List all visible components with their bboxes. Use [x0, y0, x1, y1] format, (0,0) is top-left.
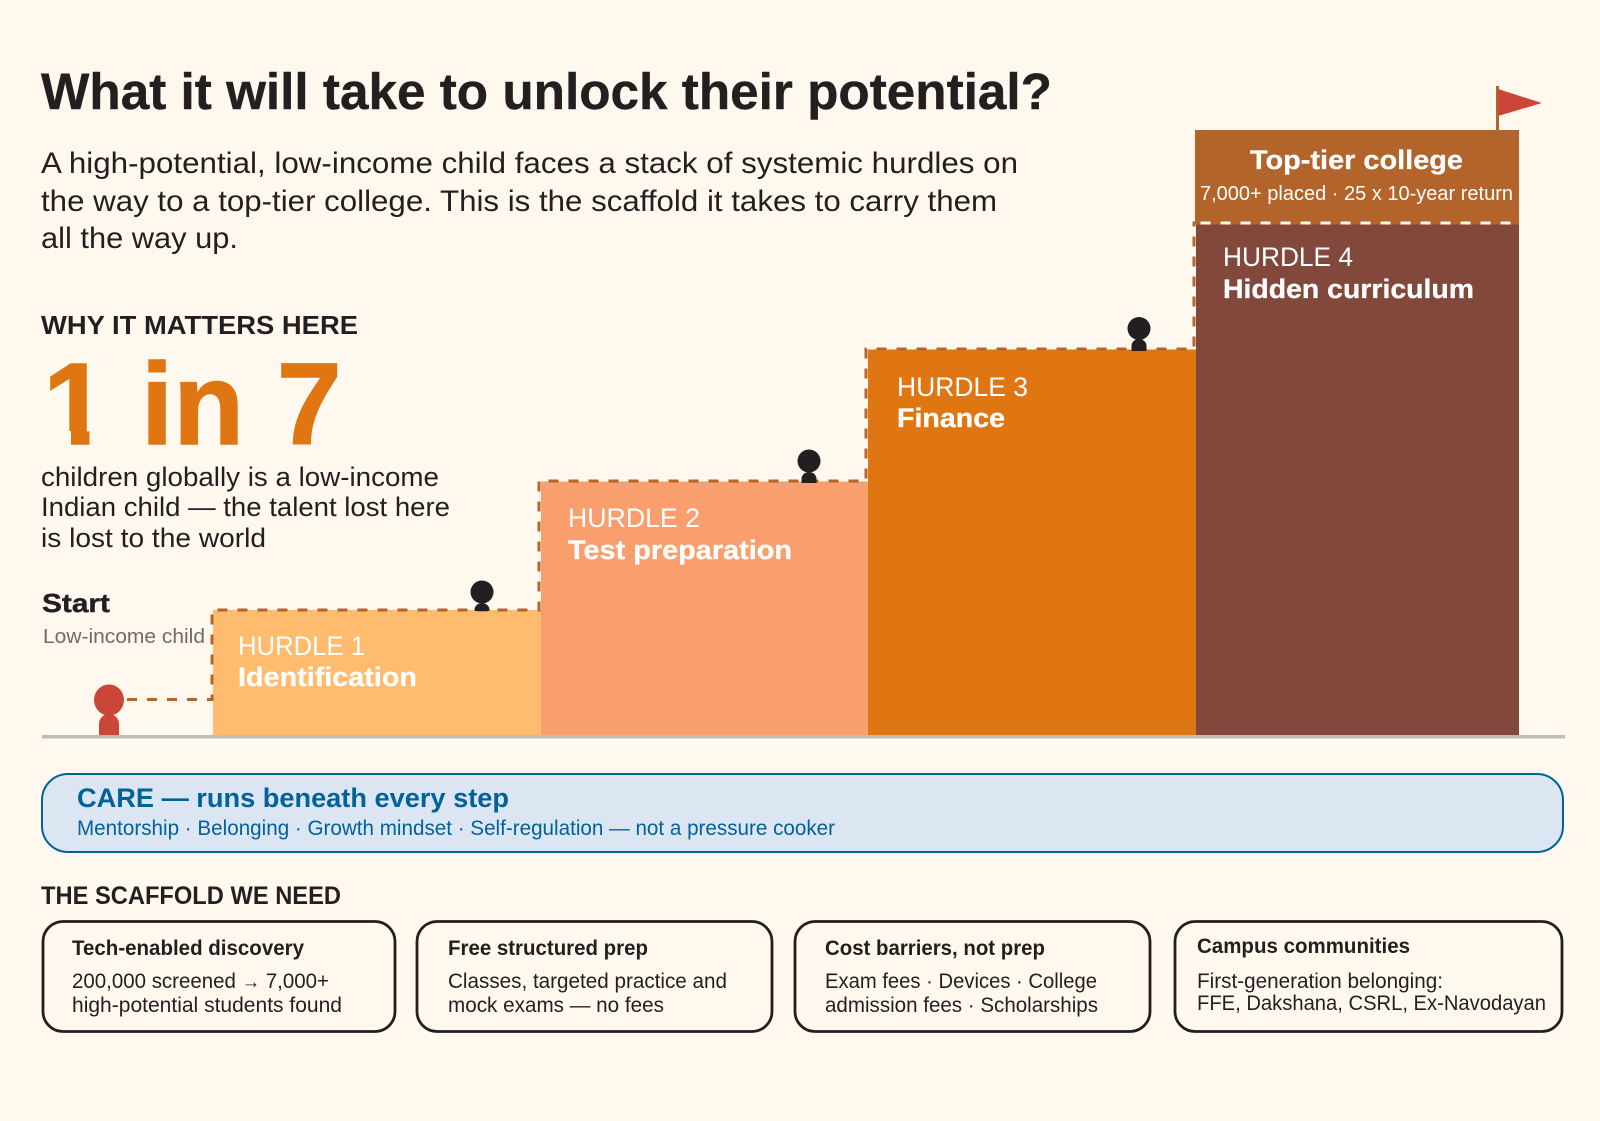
panel: hurdle 2: HURDLE 2 [568, 503, 700, 533]
panel: hurdle 3 [868, 350, 1196, 735]
intro text: A high-potential, low-income child faces a stack of systemic hurdles on [41, 147, 1018, 180]
callout: care: CARE — runs beneath every step [77, 783, 509, 813]
stat description: Indian child — the talent lost here [41, 492, 450, 522]
card: campus communities: FFE, Dakshana, CSRL, Ex-Navodayan [1197, 992, 1546, 1015]
big stat: 1 in 7: 1 [43, 339, 108, 469]
card: free structured prep: Free structured prep [448, 937, 648, 960]
card: cost barriers [795, 922, 1150, 1032]
card: free structured prep [417, 922, 772, 1032]
card: cost barriers: Exam fees · Devices · College [825, 970, 1097, 993]
intro text: the way to a top-tier college. This is the scaffold it takes to carry them [41, 185, 997, 218]
card: free structured prep: mock exams — no fees [448, 994, 664, 1017]
start label: Low-income child [43, 626, 205, 648]
dashed staircase path [127, 222, 1519, 700]
panel: hurdle 3: HURDLE 3 [897, 372, 1028, 402]
icon: figure on hurdle 3 [1128, 317, 1150, 351]
stat description: is lost to the world [41, 523, 266, 553]
card: campus communities [1175, 922, 1562, 1032]
card: campus communities: First-generation belonging: [1197, 970, 1443, 993]
stat description: children globally is a low-income [41, 462, 439, 492]
panel: hurdle 3: Finance [897, 403, 1005, 433]
panel: top-tier college: Top-tier college [1250, 145, 1463, 175]
card: free structured prep: Classes, targeted practice and [448, 970, 727, 993]
panel: hurdle 2: Test preparation [568, 535, 792, 565]
big stat: 1 in 7 [34, 339, 342, 469]
heading: the scaffold we need: THE SCAFFOLD WE NEED [41, 882, 341, 910]
baseline [42, 735, 1565, 738]
big stat: 1 in 7: 7 [277, 339, 342, 469]
start label [42, 588, 205, 648]
big stat: 1 in 7: in [141, 339, 244, 469]
panel: hurdle 4 [1196, 224, 1519, 735]
panel: top-tier college: 7,000+ placed · 25 x 10-year return [1200, 183, 1513, 205]
panel: hurdle 4: HURDLE 4 [1223, 242, 1353, 272]
panel: hurdle 4: Hidden curriculum [1223, 274, 1474, 304]
icon: child at start [94, 684, 124, 735]
callout: care [42, 774, 1563, 852]
callout: care: Mentorship · Belonging · Growth mindset · Self-regulation — not a pressure cooker [77, 817, 835, 840]
panel: hurdle 1: Identification [238, 662, 417, 692]
card: cost barriers: Cost barriers, not prep [825, 937, 1045, 960]
icon: flag [1496, 86, 1542, 130]
stat description [41, 462, 450, 553]
panel: hurdle 1: HURDLE 1 [238, 631, 365, 661]
intro text: all the way up. [41, 222, 238, 255]
title: What it will take to unlock their potential? [41, 63, 1052, 120]
icon: figure on hurdle 2 [798, 450, 820, 483]
intro text [41, 147, 1018, 255]
card: campus communities: Campus communities [1197, 935, 1410, 958]
start label: Start [42, 588, 110, 618]
card: tech-enabled discovery [43, 922, 395, 1032]
card: tech-enabled discovery: 200,000 screened → 7,000+ [72, 970, 329, 993]
panel: hurdle 1 [213, 610, 541, 735]
heading: why it matters: WHY IT MATTERS HERE [41, 310, 358, 340]
icon: figure on hurdle 1 [470, 580, 494, 611]
panel: hurdle 2 [541, 482, 868, 735]
panel: top-tier college [1195, 130, 1519, 222]
card: cost barriers: admission fees · Scholarships [825, 994, 1098, 1017]
card: tech-enabled discovery: high-potential students found [72, 994, 342, 1017]
card: tech-enabled discovery: Tech-enabled discovery [72, 937, 304, 960]
